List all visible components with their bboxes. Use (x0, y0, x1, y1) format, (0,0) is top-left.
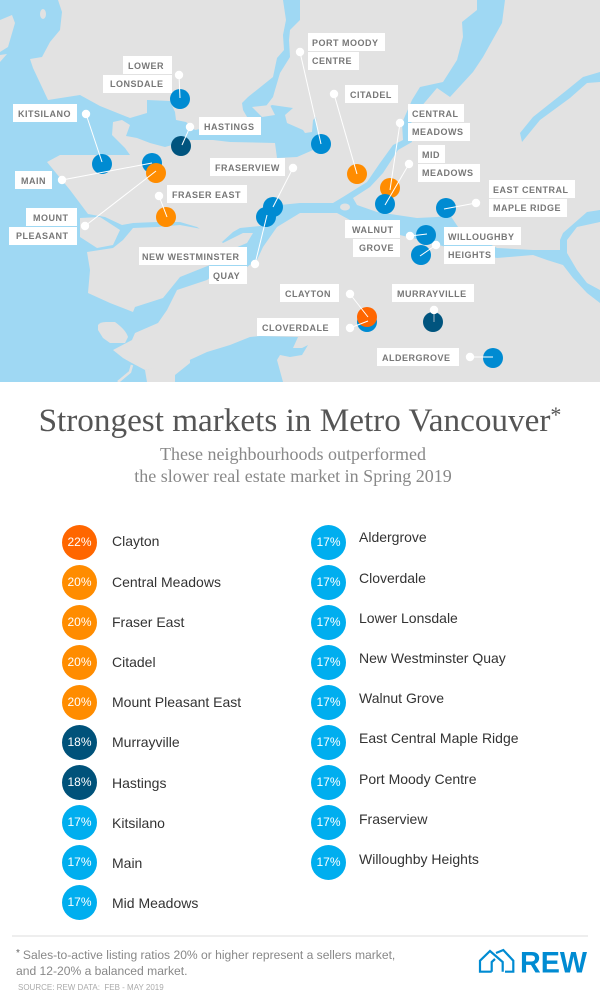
map labels: MOUNT (33, 213, 68, 223)
pin: Port Moody Centre (311, 134, 331, 154)
map labels (9, 33, 575, 366)
item: Fraser East: Fraser East (112, 614, 184, 630)
item: Lower Lonsdale (311, 605, 458, 640)
item: Mount Pleasant East (62, 685, 242, 720)
map labels: LOWER (128, 61, 164, 71)
pin: Lower Lonsdale (170, 89, 190, 109)
map labels: WALNUT (352, 225, 394, 235)
map labels: CENTRAL (412, 109, 458, 119)
item: East Central Maple Ridge: 17% (316, 735, 341, 749)
item: Fraserview: Fraserview (359, 811, 427, 827)
item: Kitsilano: 17% (67, 815, 92, 829)
map labels: HASTINGS (204, 122, 255, 132)
leader dots (58, 48, 480, 361)
list: right column (311, 525, 519, 880)
icon: houses (480, 950, 513, 972)
item: Lower Lonsdale: Lower Lonsdale (359, 610, 458, 626)
item: Central Meadows: 20% (67, 575, 92, 589)
item: Aldergrove: Aldergrove (359, 529, 427, 545)
item: Cloverdale (311, 565, 426, 600)
pin: Citadel (347, 164, 367, 184)
pin: Willoughby Heights (411, 245, 431, 265)
title: Strongest markets in Metro Vancouver* (39, 402, 561, 439)
item: Aldergrove: 17% (316, 535, 341, 549)
item: Hastings: Hastings (112, 775, 166, 791)
item: Fraserview (311, 805, 428, 840)
item: Clayton (62, 525, 159, 560)
item: Central Meadows (62, 565, 221, 600)
item: New Westminster Quay: 17% (316, 655, 341, 669)
map labels: GROVE (359, 243, 394, 253)
map labels: KITSILANO (18, 109, 71, 119)
item: Aldergrove (311, 525, 427, 560)
item: Fraser East (62, 605, 184, 640)
map labels: CITADEL (350, 90, 392, 100)
item: Clayton: 22% (67, 535, 92, 549)
item: Cloverdale: Cloverdale (359, 570, 426, 586)
item: Mid Meadows (62, 885, 198, 920)
item: Kitsilano (62, 805, 165, 840)
footnote (16, 948, 395, 978)
item: Clayton: Clayton (112, 533, 159, 549)
subtitle: These neighbourhoods outperformed (160, 444, 426, 464)
map labels: MID (422, 150, 440, 160)
list: left column (62, 525, 242, 920)
footnote: *Sales-to-active listing ratios 20% or higher represent a sellers market, (16, 948, 395, 962)
map labels: FRASERVIEW (215, 163, 280, 173)
item: Mid Meadows: Mid Meadows (112, 895, 198, 911)
item: Willoughby Heights: Willoughby Heights (359, 851, 479, 867)
item: Main: Main (112, 855, 142, 871)
item: Kitsilano: Kitsilano (112, 815, 165, 831)
item: Citadel: 20% (67, 655, 92, 669)
pin: Hastings (171, 136, 191, 156)
pin: Cloverdale (357, 312, 377, 332)
item: Central Meadows: Central Meadows (112, 574, 221, 590)
pin: Clayton (357, 307, 377, 327)
pin: East Central Maple Ridge (436, 198, 456, 218)
pin: Central Meadows (380, 178, 400, 198)
item: Mount Pleasant East: Mount Pleasant East (112, 694, 241, 710)
item: Port Moody Centre (311, 765, 476, 800)
footnote: and 12-20% a balanced market. (16, 964, 187, 978)
leader lines (62, 52, 493, 357)
pin: Kitsilano (92, 154, 112, 174)
item: Mount Pleasant East: 20% (67, 695, 92, 709)
pin: Mount Pleasant (146, 163, 166, 183)
map labels: FRASER EAST (172, 190, 241, 200)
pin: Main (142, 153, 162, 173)
item: Mid Meadows: 17% (67, 895, 92, 909)
item: Hastings: 18% (67, 775, 92, 789)
map labels: MAIN (21, 176, 46, 186)
item: East Central Maple Ridge: East Central Maple Ridge (359, 730, 519, 746)
item: Murrayville: Murrayville (112, 734, 180, 750)
map labels: CLOVERDALE (262, 323, 329, 333)
logo: REW (478, 946, 588, 980)
item: New Westminster Quay: New Westminster Quay (359, 650, 506, 666)
item: Fraser East: 20% (67, 615, 92, 629)
map labels: MAPLE RIDGE (493, 203, 561, 213)
item: East Central Maple Ridge (311, 725, 519, 760)
item: Citadel: Citadel (112, 654, 156, 670)
map labels: WILLOUGHBY (448, 232, 514, 242)
map labels: HEIGHTS (448, 250, 492, 260)
map labels: MURRAYVILLE (397, 289, 467, 299)
pin: Murrayville (423, 312, 443, 332)
map labels: PORT MOODY (312, 38, 379, 48)
map labels: CLAYTON (285, 289, 331, 299)
map labels: ALDERGROVE (382, 353, 451, 363)
map labels: MEADOWS (422, 168, 474, 178)
pin: Aldergrove (483, 348, 503, 368)
pin: Fraser East (156, 207, 176, 227)
item: Willoughby Heights: 17% (316, 855, 341, 869)
item: New Westminster Quay (311, 645, 506, 680)
item: Port Moody Centre: 17% (316, 775, 341, 789)
map labels: PLEASANT (16, 231, 69, 241)
subtitle (134, 444, 452, 486)
map labels: CENTRE (312, 56, 352, 66)
map labels: QUAY (213, 271, 240, 281)
item: Murrayville: 18% (67, 735, 92, 749)
item: Cloverdale: 17% (316, 575, 341, 589)
map labels: EAST CENTRAL (493, 185, 569, 195)
item: Fraserview: 17% (316, 815, 341, 829)
item: Main: 17% (67, 855, 92, 869)
item: Murrayville (62, 725, 180, 760)
source: SOURCE: REW DATA: FEB - MAY 2019 (18, 983, 164, 992)
map labels: MEADOWS (412, 127, 464, 137)
subtitle: the slower real estate market in Spring 2019 (134, 466, 452, 486)
item: Citadel (62, 645, 156, 680)
item: Port Moody Centre: Port Moody Centre (359, 771, 476, 787)
item: Walnut Grove: Walnut Grove (359, 690, 444, 706)
pin: Walnut Grove (416, 225, 436, 245)
item: Walnut Grove (311, 685, 444, 720)
pin: Mid Meadows (375, 194, 395, 214)
item: Main (62, 845, 142, 880)
map labels: LONSDALE (110, 79, 164, 89)
wordmark: REW (520, 946, 588, 980)
pin: New Westminster Quay (256, 207, 276, 227)
map of Metro Vancouver (0, 0, 600, 382)
item: Willoughby Heights (311, 845, 479, 880)
pin: Fraserview (263, 197, 283, 217)
item: Walnut Grove: 17% (316, 695, 341, 709)
item: Lower Lonsdale: 17% (316, 615, 341, 629)
map labels: NEW WESTMINSTER (142, 252, 240, 262)
item: Hastings (62, 765, 166, 800)
